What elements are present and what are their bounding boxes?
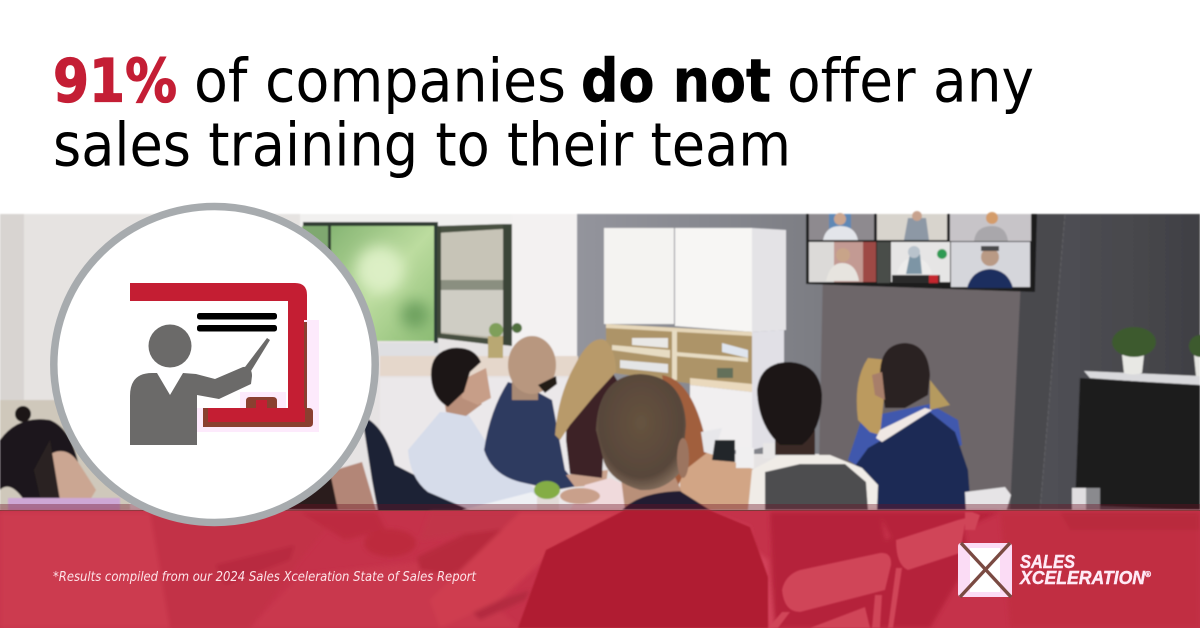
concrete wall (577, 214, 827, 454)
red overlay band (0, 510, 1200, 628)
white header background (0, 0, 1200, 214)
table with plant (534, 478, 680, 515)
badge circle with presenter icon (54, 206, 375, 522)
headline: of companies (194, 46, 566, 116)
logo wordmark: ® (1145, 570, 1151, 579)
woman in vest (748, 362, 878, 510)
logo mark (958, 543, 1012, 597)
band: foreground man's jacket (518, 510, 768, 628)
photo: team watching a video conference (0, 211, 1200, 515)
grey wall panel (818, 270, 1030, 510)
logo wordmark: SALES (1020, 552, 1075, 572)
headline (53, 46, 1034, 180)
logo: Sales Xceleration (958, 543, 1151, 597)
footnote: *Results compiled from our 2024 Sales Xceleration State of Sales Report (53, 569, 477, 585)
headline: 91% (53, 46, 177, 116)
foreground man's head (596, 374, 710, 510)
laptop and mugs (701, 428, 777, 468)
seated pair in navy and blue (848, 343, 971, 510)
icon: pink fringe (193, 320, 319, 432)
headline: sales training to their team (53, 110, 791, 180)
white chair back (965, 487, 1011, 512)
band: ghosted people and furniture (0, 510, 1200, 628)
man behind badge, dark suit (285, 416, 470, 512)
blonde woman (555, 339, 620, 478)
side table with plants (1072, 327, 1200, 510)
icon: presenter with pointer (130, 324, 270, 445)
dark wall strip (1010, 214, 1065, 510)
man in white shirt (408, 348, 548, 510)
wall-mounted TV with video call (806, 211, 1037, 292)
icon: text lines on board (197, 313, 277, 332)
concrete right wall (1040, 214, 1200, 510)
white cabinet with shelves (604, 228, 786, 450)
band: chairs (768, 512, 980, 628)
logo wordmark (1019, 552, 1151, 588)
room background (0, 214, 1200, 514)
woman at far left (0, 406, 120, 512)
headline: offer any (787, 46, 1034, 116)
dark tint strip above the band (0, 504, 1200, 510)
logo wordmark: XCELERATION (1019, 568, 1146, 588)
headline: do not (581, 46, 771, 116)
icon: presentation board (130, 283, 313, 427)
man in navy shirt (484, 336, 608, 490)
red-haired woman (660, 375, 762, 510)
window with trees (302, 222, 578, 376)
